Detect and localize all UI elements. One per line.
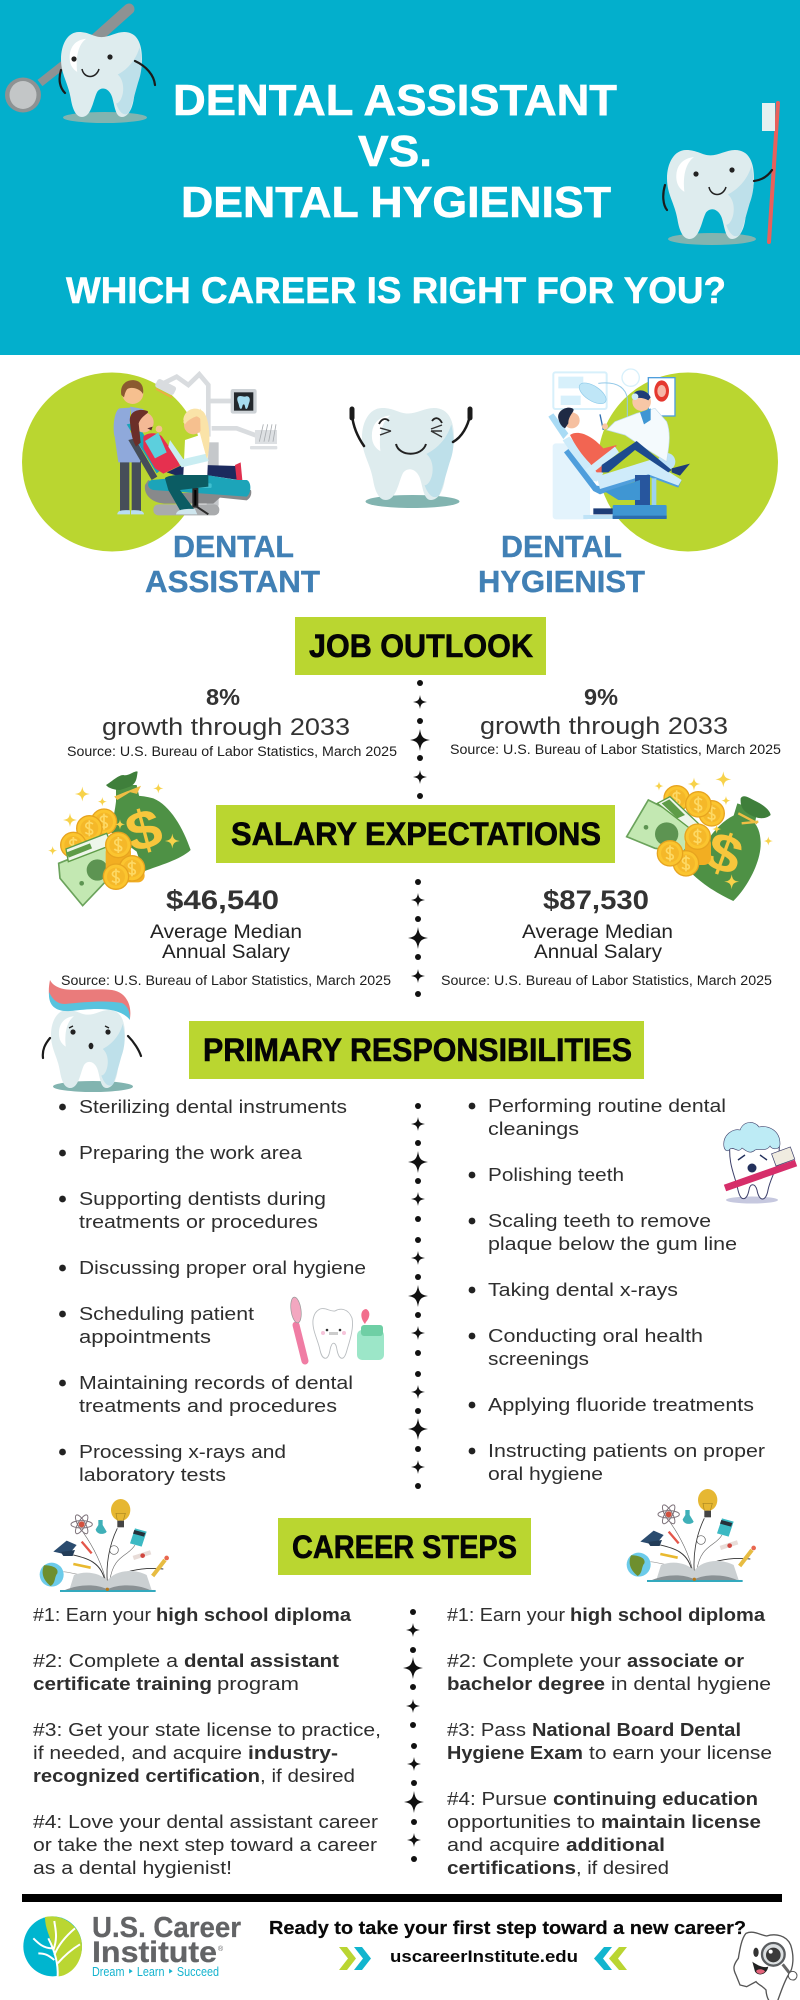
panel: dental assistant illustration — [22, 372, 277, 552]
text block: hygienist career steps: to earn your license — [589, 1742, 772, 1763]
logo: U.S. Career Institute: ® — [218, 1945, 224, 1953]
logo: U.S. Career Institute: Institute — [92, 1936, 217, 1969]
list: dental hygienist responsibilities: Taking dental x-rays — [488, 1279, 678, 1300]
call to action: Ready to take your first step toward a new career? — [269, 1918, 746, 1938]
list: dental assistant responsibilities: Preparing the work area — [79, 1142, 303, 1163]
text block: hygienist salary: Average Median — [522, 922, 673, 943]
list: dental assistant responsibilities: Processing x-rays and — [79, 1441, 286, 1462]
list: dental hygienist responsibilities: Applying fluoride treatments — [488, 1394, 754, 1415]
text block: hygienist career steps: #3: Pass — [447, 1719, 526, 1740]
text block: assistant career steps: #2: Complete a — [33, 1650, 179, 1671]
text block: assistant career steps: #3: Get your state license to practice, — [33, 1719, 381, 1740]
text block: hygienist job outlook: Source: U.S. Bureau of Labor Statistics, March 2025 — [450, 742, 781, 757]
list: dental hygienist responsibilities: Polishing teeth — [488, 1164, 624, 1185]
list: dental hygienist responsibilities: Scaling teeth to remove — [488, 1210, 711, 1231]
heading: job outlook — [295, 617, 546, 675]
text block: assistant job outlook: 8% — [206, 684, 240, 710]
text block: hygienist career steps: certifications — [447, 1857, 576, 1878]
label: dental assistant: DENTAL — [173, 529, 294, 564]
heading: salary expectations: SALARY EXPECTATIONS — [231, 816, 601, 852]
label: dental hygienist — [478, 529, 645, 599]
icon: money bag right — [627, 771, 773, 901]
label: dental hygienist: DENTAL — [501, 529, 622, 564]
divider: career steps — [403, 1609, 424, 1862]
text block: hygienist job outlook: 9% — [584, 684, 618, 710]
text block: hygienist career steps: , if desired — [576, 1857, 669, 1878]
divider: salary — [408, 879, 428, 997]
text block: hygienist career steps: #4: Pursue — [447, 1788, 547, 1809]
icon: chevrons left — [339, 1947, 371, 1970]
title: VS. — [358, 127, 432, 176]
list: dental assistant responsibilities: Sterilizing dental instruments — [79, 1096, 347, 1117]
icon: money bag left — [48, 771, 191, 906]
text block: assistant salary: $46,540 — [166, 885, 279, 915]
list: dental hygienist responsibilities: oral hygiene — [488, 1463, 603, 1484]
list: dental assistant responsibilities: Supporting dentists during — [79, 1188, 326, 1209]
text block: assistant career steps: #4: Love your dental assistant career — [33, 1811, 378, 1832]
text block: hygienist job outlook: growth through 2033 — [480, 713, 728, 740]
text block: assistant job outlook: growth through 2033 — [102, 714, 350, 741]
header banner — [0, 0, 800, 355]
list: dental assistant responsibilities: treatments and procedures — [79, 1395, 337, 1416]
text block: hygienist career steps: continuing education — [553, 1788, 758, 1809]
call to action: uscareerInstitute.edu — [390, 1947, 578, 1966]
logo: U.S. Career Institute: Dream ‣ Learn ‣ Succeed — [92, 1964, 219, 1979]
icon: chevrons right — [594, 1947, 627, 1970]
icon: open book with ideas left — [40, 1499, 169, 1592]
text block: assistant career steps: dental assistant — [184, 1650, 339, 1671]
list: dental hygienist responsibilities: screenings — [488, 1348, 589, 1369]
list: dental assistant responsibilities — [59, 1096, 366, 1485]
list: dental assistant responsibilities: Discussing proper oral hygiene — [79, 1257, 366, 1278]
text block: hygienist salary — [441, 885, 772, 988]
text block: hygienist career steps: and acquire — [447, 1834, 560, 1855]
text block: assistant salary: Annual Salary — [162, 942, 291, 963]
text block: assistant career steps: or take the next step toward a career — [33, 1834, 377, 1855]
icon: happy tooth mascot — [352, 408, 470, 508]
list: dental hygienist responsibilities: cleanings — [488, 1118, 579, 1139]
text block: hygienist career steps: additional — [566, 1834, 665, 1855]
text block: hygienist career steps: #1: Earn your — [447, 1604, 565, 1625]
text block: hygienist career steps: Hygiene Exam — [447, 1742, 583, 1763]
text block: assistant salary — [61, 885, 391, 988]
label: dental assistant: ASSISTANT — [145, 564, 320, 599]
heading: primary responsibilities — [189, 1021, 644, 1079]
label: dental hygienist: HYGIENIST — [478, 564, 645, 599]
divider: job outlook — [410, 680, 430, 799]
icon: tooth with magnifier — [734, 1932, 797, 2000]
icon: tooth holding toothbrush — [663, 103, 778, 245]
icon: money bag left: $ — [119, 796, 169, 864]
text block: assistant career steps: certificate training — [33, 1673, 212, 1694]
list: dental assistant responsibilities: appointments — [79, 1326, 211, 1347]
list: dental hygienist responsibilities: Conducting oral health — [488, 1325, 703, 1346]
subtitle: WHICH CAREER IS RIGHT FOR YOU? — [66, 269, 726, 311]
title: DENTAL ASSISTANT — [173, 76, 617, 125]
heading: primary responsibilities: PRIMARY RESPONSIBILITIES — [203, 1032, 632, 1068]
text block: hygienist career steps: bachelor degree — [447, 1673, 605, 1694]
text block: hygienist career steps: in dental hygiene — [611, 1673, 771, 1694]
text block: assistant career steps: program — [217, 1673, 299, 1694]
list: dental assistant responsibilities: Scheduling patient — [79, 1303, 254, 1324]
text block: hygienist career steps: associate or — [627, 1650, 744, 1671]
icon: money bag right: $ — [697, 820, 750, 888]
icon: tooth with toothpaste — [43, 980, 141, 1092]
label: dental assistant — [145, 529, 320, 599]
list: dental hygienist responsibilities: Performing routine dental — [488, 1095, 726, 1116]
heading: career steps — [278, 1518, 531, 1575]
text block: assistant career steps: #1: Earn your — [33, 1604, 151, 1625]
icon: tooth holding dental mirror — [5, 9, 155, 123]
text block: hygienist career steps: National Board Dental — [532, 1719, 741, 1740]
icon: tooth with floss and brush — [289, 1296, 384, 1361]
logo: U.S. Career Institute — [23, 1912, 241, 1979]
text block: hygienist career steps: maintain license — [601, 1811, 761, 1832]
text block: assistant salary: Average Median — [150, 922, 302, 943]
title: DENTAL HYGIENIST — [181, 178, 611, 227]
text block: assistant career steps — [33, 1604, 381, 1878]
heading: job outlook: JOB OUTLOOK — [309, 628, 533, 664]
footer divider bar — [22, 1894, 782, 1902]
call to action — [269, 1918, 746, 1966]
list: dental hygienist responsibilities — [469, 1095, 765, 1484]
icon: tooth with foam and toothbrush — [724, 1122, 796, 1204]
text block: hygienist salary: Annual Salary — [534, 942, 663, 963]
list: dental hygienist responsibilities: plaque below the gum line — [488, 1233, 737, 1254]
panel: dental hygienist illustration — [548, 369, 778, 552]
list: dental assistant responsibilities: laboratory tests — [79, 1464, 226, 1485]
list: dental assistant responsibilities: Maintaining records of dental — [79, 1372, 353, 1393]
text block: assistant career steps: if needed, and acquire — [33, 1742, 242, 1763]
text block: assistant career steps: as a dental hygienist! — [33, 1857, 232, 1878]
text block: hygienist career steps — [447, 1604, 772, 1878]
text block: assistant job outlook: Source: U.S. Bureau of Labor Statistics, March 2025 — [67, 744, 397, 759]
text block: hygienist salary: Source: U.S. Bureau of Labor Statistics, March 2025 — [441, 973, 772, 988]
text block: hygienist career steps: high school diploma — [570, 1604, 766, 1625]
heading: career steps: CAREER STEPS — [292, 1529, 517, 1565]
text block: assistant job outlook — [67, 684, 397, 759]
list: dental hygienist responsibilities: Instructing patients on proper — [488, 1440, 765, 1461]
text block: hygienist job outlook — [450, 684, 781, 757]
text block: assistant salary: Source: U.S. Bureau of Labor Statistics, March 2025 — [61, 973, 391, 988]
divider: responsibilities — [408, 1103, 428, 1489]
text block: assistant career steps: , if desired — [260, 1765, 355, 1786]
icon: open book with ideas right — [627, 1489, 756, 1582]
heading: salary expectations — [216, 805, 615, 863]
text block: assistant career steps: recognized certification — [33, 1765, 260, 1786]
text block: assistant career steps: industry- — [248, 1742, 338, 1763]
text block: assistant career steps: high school diploma — [156, 1604, 352, 1625]
title — [173, 76, 617, 227]
text block: hygienist salary: $87,530 — [543, 885, 649, 915]
logo: U.S. Career Institute: U.S. Career — [92, 1912, 241, 1944]
text block: hygienist career steps: #2: Complete your — [447, 1650, 621, 1671]
list: dental assistant responsibilities: treatments or procedures — [79, 1211, 318, 1232]
text block: hygienist career steps: opportunities to — [447, 1811, 595, 1832]
